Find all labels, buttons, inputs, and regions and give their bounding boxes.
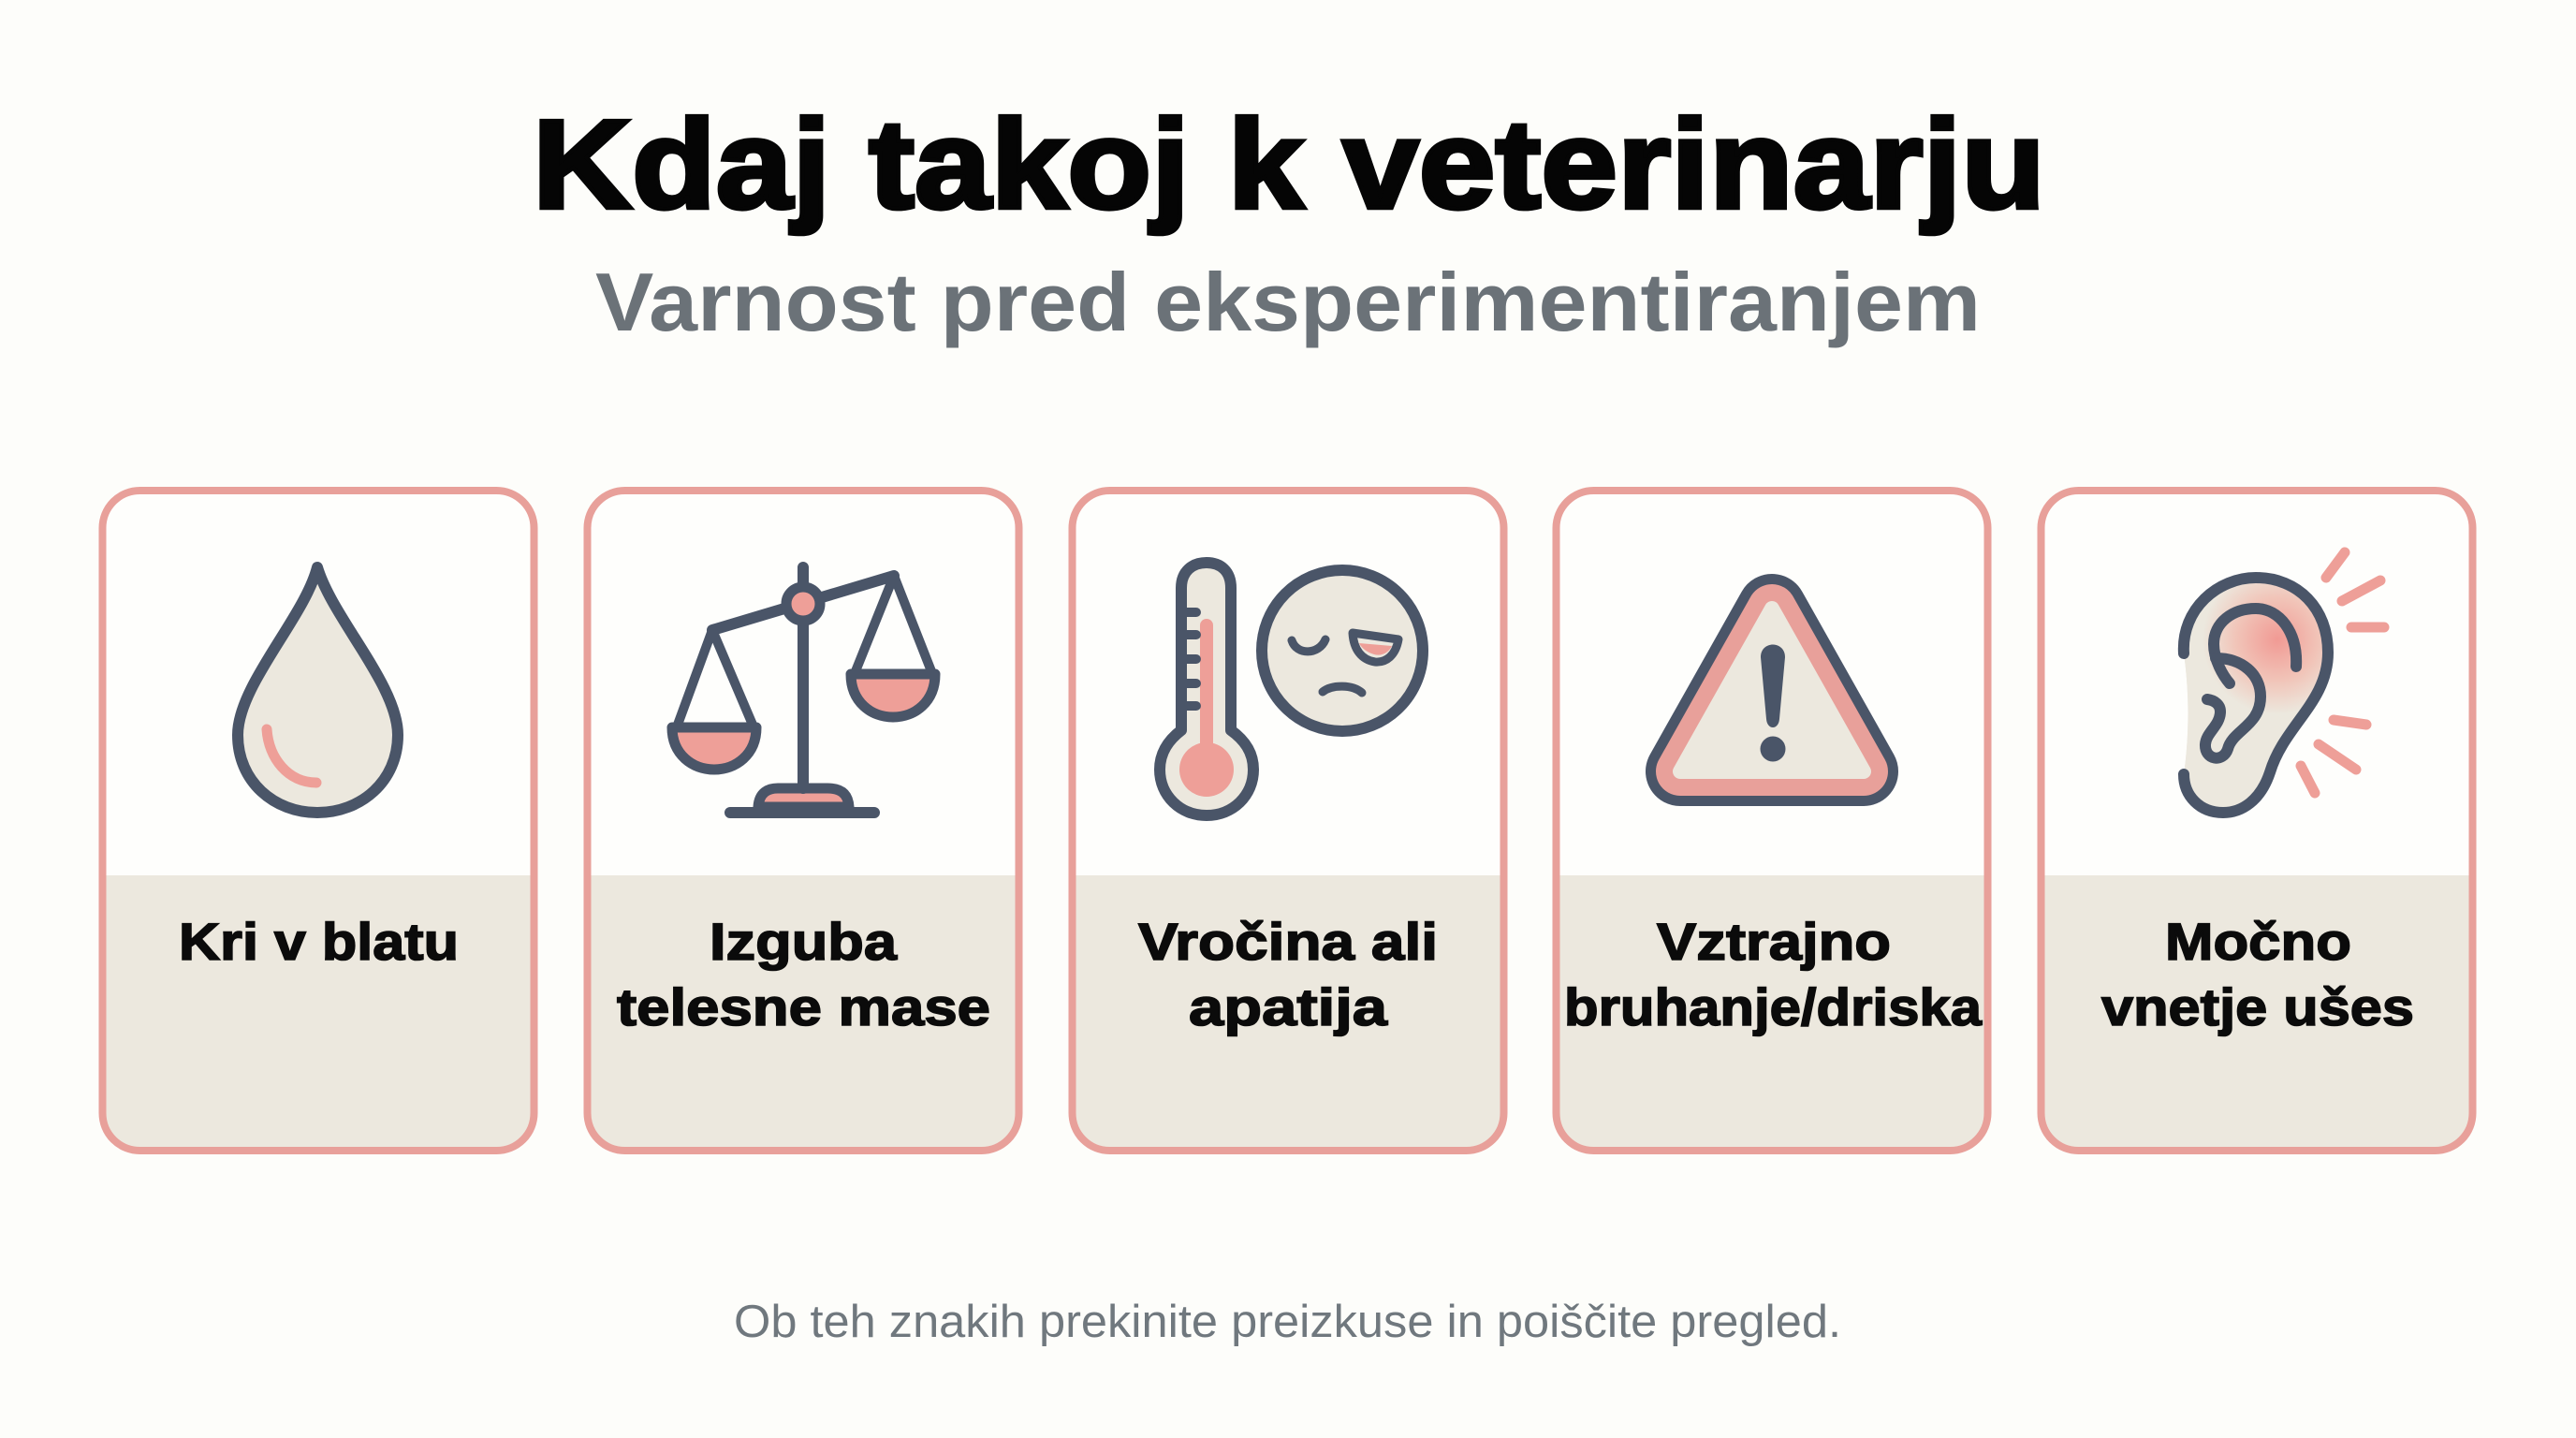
label: bruhanje/driska [1564, 977, 1983, 1036]
label [1138, 912, 1438, 1036]
label: Kri v blatu [179, 912, 459, 971]
label: Vročina ali [1138, 912, 1438, 971]
label [617, 912, 990, 1036]
panel: fever or apathy [1073, 491, 1503, 1151]
label: vnetje ušes [2101, 977, 2414, 1036]
label: Močno [2165, 912, 2351, 971]
panel: severe ear infection [2041, 491, 2473, 1151]
footer note: Ob teh znakih prekinite preizkuse in poiščite pregled. [734, 1297, 1841, 1347]
icon: scales [672, 567, 935, 813]
panel: weight loss [588, 491, 1018, 1151]
subtitle: Varnost pred eksperimentiranjem [595, 256, 1981, 348]
label: apatija [1189, 977, 1388, 1036]
label: telesne mase [617, 977, 990, 1036]
icon: inflamed ear [2184, 552, 2384, 813]
label [1564, 912, 1983, 1036]
panel: blood in stool [103, 491, 534, 1151]
icon: blood drop [238, 567, 398, 813]
label: Vztrajno [1657, 912, 1891, 971]
panel: persistent vomiting or diarrhea [1556, 491, 1988, 1151]
label: Izguba [710, 912, 898, 971]
title: Kdaj takoj k veterinarju [533, 94, 2045, 235]
icon: warning triangle [1680, 609, 1864, 771]
icon: sick face [1262, 570, 1423, 731]
label [2101, 912, 2414, 1036]
icon: pain rays [2301, 552, 2384, 793]
icon: thermometer [1160, 563, 1253, 815]
